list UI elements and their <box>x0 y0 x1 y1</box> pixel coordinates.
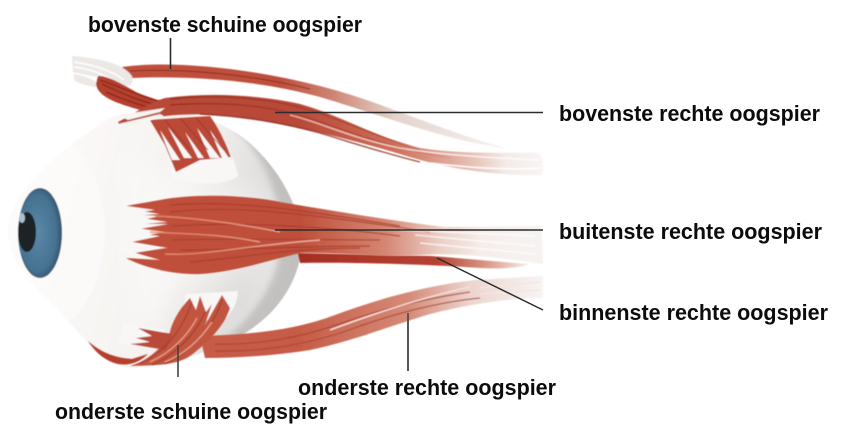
muscle: buitenste rechte oogspier <box>120 196 543 274</box>
eyeball <box>17 115 300 368</box>
label: onderste schuine oogspier: onderste schuine oogspier <box>55 399 327 424</box>
label: bovenste rechte oogspier: bovenste rechte oogspier <box>559 101 820 126</box>
label: bovenste schuine oogspier: bovenste schuine oogspier <box>88 12 362 37</box>
muscle: bovenste schuine oogspier <box>72 56 511 149</box>
leader lines <box>170 38 543 377</box>
oblique belly <box>96 76 168 116</box>
upper tendon <box>182 291 238 320</box>
muscle: binnenste rechte oogspier <box>298 253 530 268</box>
pupil <box>18 212 36 252</box>
label: onderste rechte oogspier: onderste rechte oogspier <box>298 375 556 400</box>
muscle: onderste rechte oogspier <box>200 276 543 358</box>
label: buitenste rechte oogspier: buitenste rechte oogspier <box>559 219 822 244</box>
pulley tendon <box>72 56 133 88</box>
muscle: onderste schuine oogspier <box>88 291 238 366</box>
fan: bovenste schuine aanhechting <box>150 116 238 184</box>
label: binnenste rechte oogspier: binnenste rechte oogspier <box>559 300 828 325</box>
lower tendon <box>118 323 165 348</box>
muscle: bovenste rechte oogspier <box>118 95 543 175</box>
iris <box>18 188 62 278</box>
